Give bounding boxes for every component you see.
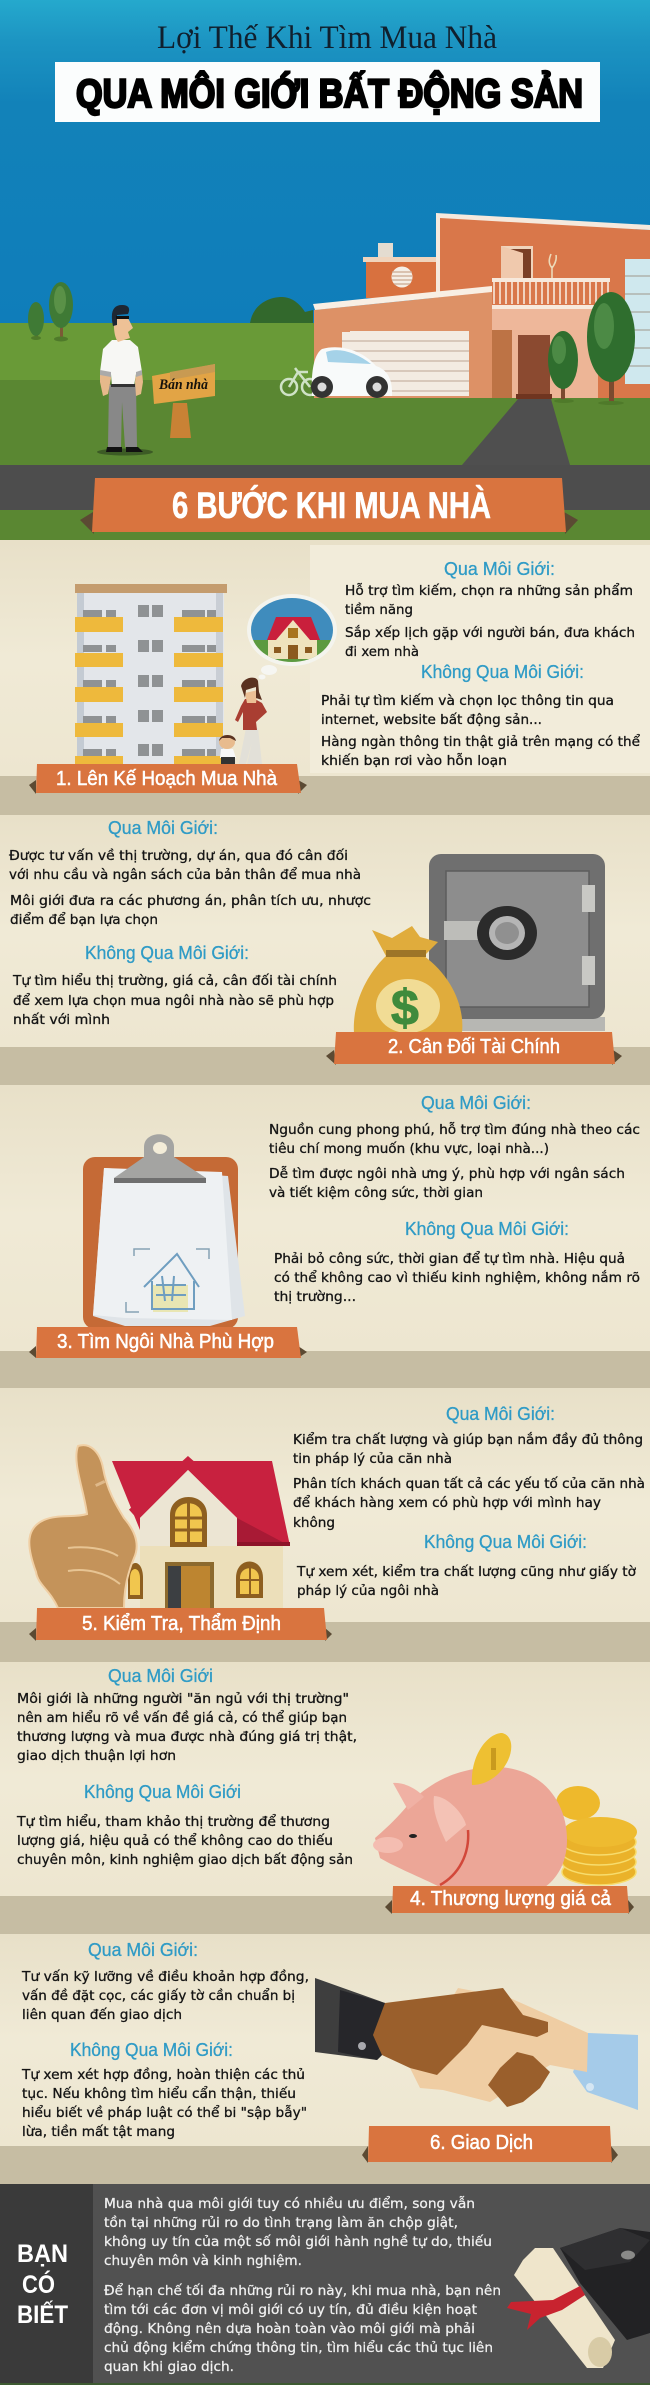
text block: không qua môi giới: Phải tự tìm kiếm và chọn lọc thông tin qua <box>321 692 614 709</box>
text block: qua môi giới: giao dịch thuận lợi hơn <box>17 1748 176 1764</box>
text block: qua môi giới: Dễ tìm được ngôi nhà ưng ý, phù hợp với ngân sách <box>269 1165 625 1182</box>
panel: step 1 <box>0 540 650 815</box>
text block: không qua môi giới: Không Qua Môi Giới: <box>421 661 584 682</box>
text block: first paragraph <box>104 2195 492 2269</box>
text block: second paragraph: tìm tới các đơn vị môi giới có uy tín, đủ điều kiện hoạt <box>104 2301 477 2318</box>
illustration: piggy bank and coins <box>373 1733 637 1887</box>
text block: không qua môi giới: Không Qua Môi Giới: <box>85 942 249 963</box>
illustration: man <box>97 305 153 456</box>
text block: không qua môi giới: internet, website bất động sản... <box>321 712 542 728</box>
text block: qua môi giới: Môi giới đưa ra các phương án, phân tích ưu, nhược <box>10 893 371 909</box>
illustration: house with thumbs up <box>29 1445 290 1608</box>
text block: không qua môi giới: có thể không cao vì thiếu kinh nghiệm, không nắm rõ <box>274 1269 640 1286</box>
text block: qua môi giới: Qua Môi Giới: <box>421 1092 531 1113</box>
illustration: safe <box>429 854 605 1031</box>
text block: không qua môi giới <box>12 942 337 1028</box>
text block: qua môi giới: Hỗ trợ tìm kiếm, chọn ra những sản phẩm <box>345 582 633 599</box>
panel: step 6 <box>0 1934 650 2184</box>
illustration: front trees <box>548 292 635 405</box>
banner: step 2 <box>326 1032 622 1065</box>
panel: step 2 <box>0 815 650 1085</box>
text block: qua môi giới <box>269 1092 640 1201</box>
heading: bạn có biết: BIẾT <box>17 2300 68 2329</box>
text block: qua môi giới: điểm để bạn lựa chọn <box>10 911 158 928</box>
banner: 6 bước khi mua nhà: 6 BƯỚC KHI MUA NHÀ <box>172 484 491 526</box>
text block: không qua môi giới: Tự xem xét hợp đồng, hoàn thiện các thủ <box>21 2066 305 2083</box>
text block: first paragraph: không uy tín của một số môi giới hành nghề tự do, thiếu <box>104 2233 492 2250</box>
banner: step 6: 6. Giao Dịch <box>430 2132 533 2154</box>
text block: second paragraph: động. Không nên dựa hoàn toàn vào môi giới mà phải <box>104 2321 475 2337</box>
panel: step 5 <box>0 1388 650 1662</box>
text block: first paragraph: Mua nhà qua môi giới tuy có nhiều ưu điểm, song vẫn <box>104 2195 475 2212</box>
text block: qua môi giới: đi xem nhà <box>345 644 419 660</box>
text block: qua môi giới: để khách hàng xem có phù hợp với mình hay <box>293 1494 601 1511</box>
text block: qua môi giới: tiềm năng <box>345 601 413 618</box>
illustration: house <box>313 213 650 399</box>
illustration: background trees <box>28 282 313 342</box>
banner: step 1 <box>29 764 307 794</box>
heading: bạn có biết: CÓ <box>22 2269 55 2299</box>
text block: không qua môi giới: hiểu biết về pháp luật có thể bi "sập bẫy" <box>22 2104 307 2121</box>
illustration: money bag: $ <box>391 980 419 1036</box>
text block: first paragraph: chuyên môn và kinh nghiệm. <box>104 2253 302 2269</box>
heading: bạn có biết <box>17 2240 68 2329</box>
banner: step 4: 4. Thương lượng giá cả <box>410 1888 612 1910</box>
text block: không qua môi giới: Không Qua Môi Giới: <box>424 1531 587 1552</box>
text block: không qua môi giới: Phải bỏ công sức, thời gian để tự tìm nhà. Hiệu quả <box>274 1250 625 1267</box>
text block: qua môi giới: Qua Môi Giới: <box>108 817 218 838</box>
text block: second paragraph: Để hạn chế tối đa những rủi ro này, khi mua nhà, bạn nên <box>104 2282 501 2299</box>
text block: không qua môi giới: lượng giá, hiệu quả có thể không cao do thiếu <box>17 1832 333 1849</box>
text block: không qua môi giới: pháp lý của ngôi nhà <box>297 1583 439 1599</box>
text block: second paragraph: chủ động kiểm chứng thông tin, tìm hiểu các thủ tục liên <box>104 2339 493 2356</box>
text block: second paragraph <box>104 2282 501 2375</box>
title: Lợi Thế Khi Tìm Mua Nhà: Lợi Thế Khi Tìm Mua Nhà <box>157 20 497 56</box>
text block: qua môi giới: Qua Môi Giới: <box>88 1939 198 1960</box>
text block: không qua môi giới: Không Qua Môi Giới <box>84 1781 241 1802</box>
heading: bạn có biết: BẠN <box>17 2240 68 2268</box>
text block: không qua môi giới: Tự xem xét, kiểm tra chất lượng cũng như giấy tờ <box>296 1563 637 1580</box>
text block: không qua môi giới <box>21 2039 307 2140</box>
text block: qua môi giới: và tiết kiệm công sức, thời gian <box>269 1184 483 1201</box>
text block: không qua môi giới <box>296 1531 637 1599</box>
text block: không qua môi giới <box>16 1781 353 1868</box>
text block: first paragraph: tồn tại những rủi ro do tình trạng làm ăn chộp giật, <box>104 2214 458 2231</box>
text block: qua môi giới: thương lượng và mua được nhà đúng giá trị thật, <box>17 1729 357 1745</box>
text block: không qua môi giới: tục. Nếu không tìm hiểu cẩn thận, thiếu <box>22 2085 296 2102</box>
text block: không qua môi giới: để xem lựa chọn mua ngôi nhà nào sẽ phù hợp <box>13 992 334 1009</box>
banner: step 5 <box>29 1608 332 1641</box>
text block: qua môi giới: Sắp xếp lịch gặp với người bán, đưa khách <box>345 624 635 641</box>
banner: step 6 <box>362 2126 618 2163</box>
banner: step 1: 1. Lên Kế Hoạch Mua Nhà <box>56 768 278 790</box>
text block: không qua môi giới: Tự tìm hiểu thị trường, giá cả, cân đối tài chính <box>12 972 337 989</box>
text block: qua môi giới: không <box>293 1515 335 1531</box>
text block: qua môi giới: Qua Môi Giới <box>108 1665 213 1686</box>
text block: qua môi giới: Phân tích khách quan tất cả các yếu tố của căn nhà <box>293 1475 645 1492</box>
text block: qua môi giới: với nhu cầu và ngân sách của bản thân để mua nhà <box>9 866 361 883</box>
panel: step 3 <box>0 1085 650 1388</box>
panel: step 4 <box>0 1662 650 1934</box>
text block: qua môi giới <box>9 817 371 928</box>
illustration: diploma and graduation cap <box>507 2228 650 2368</box>
illustration: sale sign <box>152 364 215 438</box>
text block: qua môi giới: Kiểm tra chất lượng và giúp bạn nắm đầy đủ thông <box>293 1431 643 1448</box>
panel: hero scene <box>0 0 650 540</box>
banner: step 3: 3. Tìm Ngôi Nhà Phù Hợp <box>57 1331 274 1353</box>
text block: qua môi giới: nên am hiểu rõ về vấn đề giá cả, có thể giúp bạn <box>17 1709 347 1726</box>
text block: qua môi giới <box>293 1403 645 1531</box>
text block: không qua môi giới: Hàng ngàn thông tin thật giả trên mạng có thể <box>321 733 641 750</box>
text block: qua môi giới: Qua Môi Giới: <box>446 1403 555 1424</box>
heading: white title box <box>55 62 600 122</box>
illustration: money bag <box>354 926 462 1036</box>
text block: không qua môi giới: Không Qua Môi Giới: <box>70 2039 233 2060</box>
illustration: handshake <box>315 1978 638 2110</box>
text block: qua môi giới: tiêu chí mong muốn (khu vực, loại nhà...) <box>269 1140 549 1157</box>
text block: không qua môi giới <box>321 661 641 769</box>
text block: qua môi giới: Được tư vấn về thị trường, dự án, qua đó cân đối <box>9 847 348 864</box>
illustration: car and bicycle <box>281 347 392 398</box>
text block: qua môi giới: Qua Môi Giới: <box>444 558 555 579</box>
banner: step 2: 2. Cân Đối Tài Chính <box>388 1036 560 1058</box>
text block: qua môi giới <box>17 1665 357 1764</box>
banner: step 3 <box>29 1327 307 1358</box>
text block: qua môi giới <box>21 1939 309 2023</box>
text block: không qua môi giới: Tự tìm hiểu, tham khảo thị trường để thương <box>16 1813 330 1830</box>
text block: qua môi giới: Nguồn cung phong phú, hỗ trợ tìm đúng nhà theo các <box>269 1121 640 1138</box>
text block: second paragraph: quan khi giao dịch. <box>104 2359 234 2375</box>
text block: qua môi giới: vấn đề đặt cọc, các giấy tờ cần chuẩn bị <box>22 1987 295 2004</box>
text block: không qua môi giới: chuyên môn, kinh nghiệm giao dịch bất động sản <box>17 1852 353 1868</box>
text block: qua môi giới: Tư vấn kỹ lưỡng về điều khoản hợp đồng, <box>21 1968 309 1985</box>
illustration: clipboard with house sketch <box>83 1134 245 1329</box>
illustration: mother and child <box>219 678 267 764</box>
banner: 6 bước khi mua nhà <box>80 478 578 534</box>
sign text: Bán nhà <box>158 377 208 393</box>
illustration: driveway and road <box>0 399 650 510</box>
illustration: thought bubble with house <box>247 594 337 680</box>
text block: không qua môi giới: nhất với mình <box>13 1012 110 1028</box>
text block: qua môi giới <box>345 558 635 660</box>
panel: bạn có biết <box>0 2184 650 2385</box>
text block: qua môi giới: Môi giới là những người "ăn ngủ với thị trường" <box>17 1691 349 1707</box>
text block: không qua môi giới: thị trường... <box>274 1289 356 1305</box>
text block: không qua môi giới: lừa, tiền mất tật mang <box>22 2123 175 2140</box>
text block: qua môi giới: tin pháp lý của căn nhà <box>293 1451 452 1467</box>
banner: step 5: 5. Kiểm Tra, Thẩm Định <box>82 1613 281 1635</box>
banner: step 4 <box>385 1886 634 1914</box>
text block: qua môi giới: liên quan đến giao dịch <box>22 2006 182 2023</box>
text block: không qua môi giới: khiến bạn rơi vào hỗn loạn <box>321 752 507 769</box>
text block: không qua môi giới <box>274 1218 640 1305</box>
illustration: apartment building <box>75 584 227 764</box>
text block: không qua môi giới: Không Qua Môi Giới: <box>405 1218 569 1239</box>
